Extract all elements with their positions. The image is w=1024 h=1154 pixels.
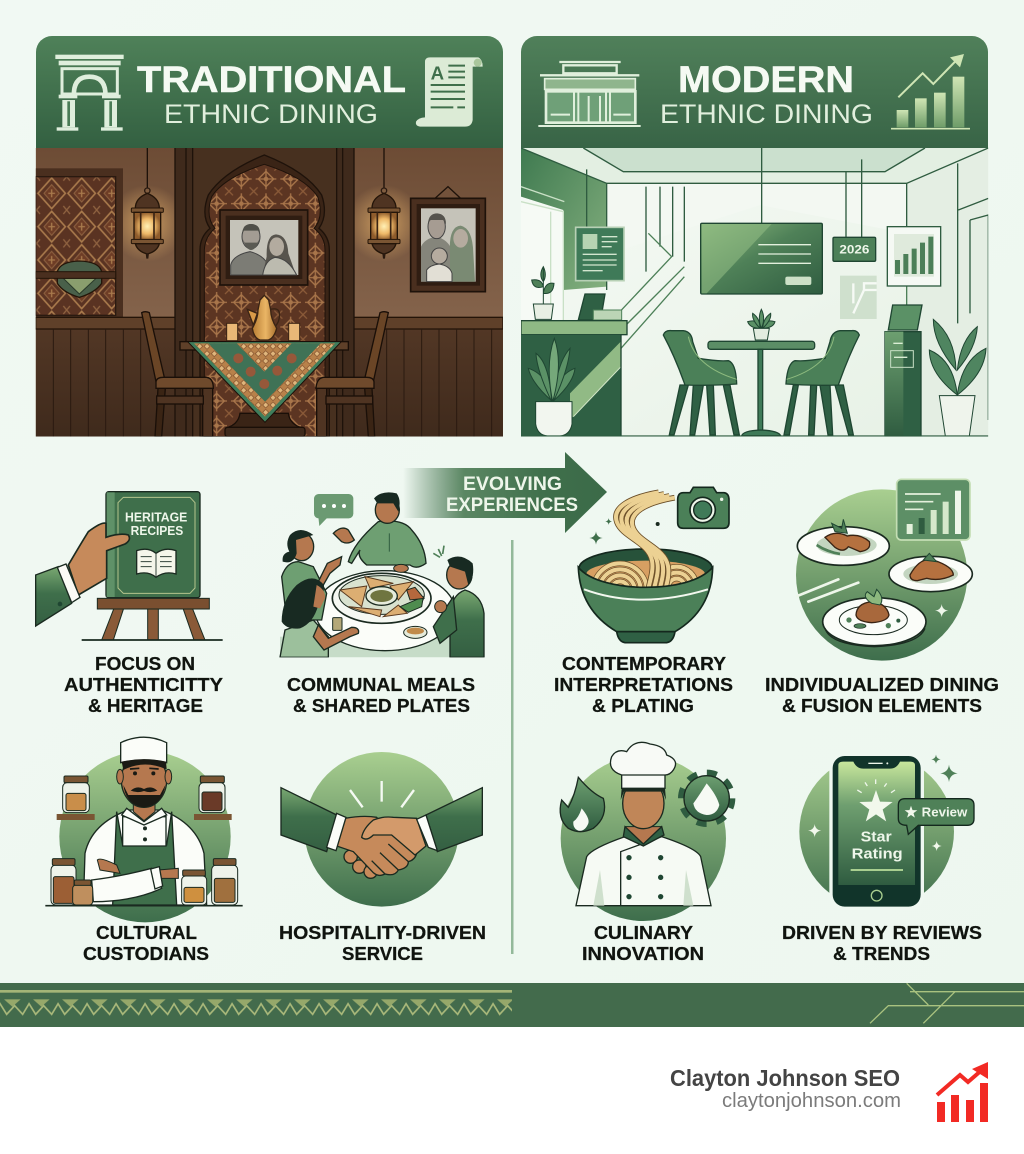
chair left — [142, 312, 213, 437]
icon: classical arch — [55, 55, 124, 131]
label: communal meals and shared plates — [287, 674, 475, 716]
label: individualized dining and fusion elements: INDIVIDUALIZED DINING — [765, 674, 999, 695]
framed photo: family — [411, 187, 485, 292]
label: hospitality-driven service — [279, 922, 486, 964]
item: culinary innovation — [560, 742, 732, 964]
label: focus on authenticity and heritage: & HERITAGE — [88, 695, 203, 716]
footer band — [0, 983, 1024, 1027]
label: focus on authenticity and heritage — [64, 653, 224, 716]
icon: chef with flame and gear — [560, 742, 732, 921]
heading: modern: MODERN — [678, 58, 854, 100]
candles — [227, 323, 300, 341]
icon: phone with star rating: Rating — [852, 845, 903, 862]
cafe chair right — [784, 331, 859, 435]
icon: heritage recipes book on easel: RECIPES — [131, 523, 184, 538]
label: driven by reviews and trends — [782, 922, 982, 964]
cafe table — [708, 341, 815, 436]
modern header band — [521, 36, 988, 148]
icon: modern restaurant — [538, 62, 641, 126]
table plant — [748, 309, 775, 340]
lantern right — [368, 148, 400, 259]
label: communal meals and shared plates: & SHARED PLATES — [293, 695, 470, 716]
icon: red growth chart — [937, 1062, 988, 1122]
small plant on counter — [532, 267, 554, 319]
potted plant right — [929, 319, 986, 436]
label: contemporary interpretations and plating: & PLATING — [592, 695, 694, 716]
year sign: 2026 — [839, 244, 870, 257]
lantern left — [131, 148, 163, 259]
modern room walls — [782, 376, 884, 435]
label: culinary innovation: CULINARY — [594, 922, 694, 943]
label: culinary innovation: INNOVATION — [582, 943, 704, 964]
potted plant left — [528, 338, 575, 436]
golden pitcher — [247, 295, 280, 340]
icon: plated dishes with data card — [796, 479, 972, 661]
label: hospitality-driven service: SERVICE — [342, 943, 423, 964]
label: communal meals and shared plates: COMMUNAL MEALS — [287, 674, 475, 695]
modern circuit lines — [870, 983, 1024, 1023]
table — [180, 342, 348, 437]
chair right — [316, 312, 388, 437]
floor plan tile — [840, 276, 877, 319]
icon: chef with spice jars — [45, 737, 243, 922]
label: individualized dining and fusion elements: & FUSION ELEMENTS — [782, 695, 982, 716]
year sign — [833, 237, 876, 261]
item: contemporary interpretations — [554, 487, 733, 716]
subheading: ethnic dining: ETHNIC DINING — [660, 99, 873, 129]
wainscot — [36, 317, 503, 437]
wall poster — [576, 227, 624, 281]
item: individualized dining — [765, 479, 999, 716]
label: cultural custodians: CULTURAL — [96, 922, 197, 943]
tablecloth — [188, 342, 341, 422]
panel: modern ethnic dining — [521, 36, 988, 437]
kiosk — [885, 305, 922, 437]
label: contemporary interpretations and plating: INTERPRETATIONS — [554, 674, 733, 695]
panel: traditional ethnic dining — [36, 36, 503, 437]
arrow label line 1: EVOLVING — [463, 474, 562, 495]
label: focus on authenticity and heritage: AUTHENTICITTY — [64, 674, 224, 695]
label: culinary innovation — [582, 922, 704, 964]
cafe chair left — [663, 331, 739, 435]
wall screen — [701, 223, 822, 294]
divider between columns — [511, 540, 514, 954]
label: cultural custodians: CUSTODIANS — [83, 943, 209, 964]
icon: growth chart — [891, 54, 970, 129]
icon: heritage recipes book on easel: HERITAGE — [125, 510, 188, 525]
icon: noodle bowl and camera — [578, 487, 729, 643]
label: hospitality-driven service: HOSPITALITY-DRIVEN — [279, 922, 486, 943]
item: driven by reviews and trends — [782, 753, 982, 964]
item: cultural custodians — [45, 737, 243, 964]
icon: recipe scroll: A — [431, 62, 444, 83]
label: contemporary interpretations and plating — [554, 653, 733, 716]
subheading: ethnic dining: ETHNIC DINING — [164, 99, 378, 129]
traditional wall — [36, 148, 503, 437]
icon: phone with star rating — [799, 753, 974, 910]
reception monitor — [578, 294, 622, 320]
green left wall — [521, 148, 607, 290]
wall chart — [887, 227, 941, 286]
brand url: claytonjohnson.com — [722, 1090, 901, 1112]
label: driven by reviews and trends: DRIVEN BY REVIEWS — [782, 922, 982, 943]
icon: phone with star rating: Review — [922, 806, 967, 820]
label: focus on authenticity and heritage: FOCUS ON — [95, 653, 195, 674]
item: authenticity and heritage — [36, 492, 224, 716]
icon: recipe scroll — [416, 57, 483, 127]
wooden alcove — [175, 148, 354, 437]
traditional zigzag border — [0, 990, 512, 1018]
icon: heritage recipes book on easel — [36, 492, 223, 640]
heading: traditional: TRADITIONAL — [137, 58, 406, 100]
reception counter — [521, 321, 627, 437]
arrow: evolving experiences — [403, 452, 607, 533]
icon: handshake — [281, 752, 482, 907]
brand name: Clayton Johnson SEO — [670, 1065, 900, 1091]
brand block — [670, 1062, 988, 1122]
label: driven by reviews and trends: & TRENDS — [833, 943, 930, 964]
item: communal meals — [280, 492, 484, 716]
traditional header band — [36, 36, 503, 148]
arrow label line 2: EXPERIENCES — [446, 495, 578, 516]
icon: phone with star rating: Star — [861, 829, 892, 846]
label: cultural custodians — [83, 922, 209, 964]
label: individualized dining and fusion elements — [765, 674, 999, 716]
icon: family sharing a plate — [280, 492, 484, 657]
framed photo: couple — [220, 210, 308, 285]
item: hospitality-driven service — [279, 752, 486, 964]
label: contemporary interpretations and plating: CONTEMPORARY — [562, 653, 727, 674]
patterned wall panel — [36, 168, 123, 318]
